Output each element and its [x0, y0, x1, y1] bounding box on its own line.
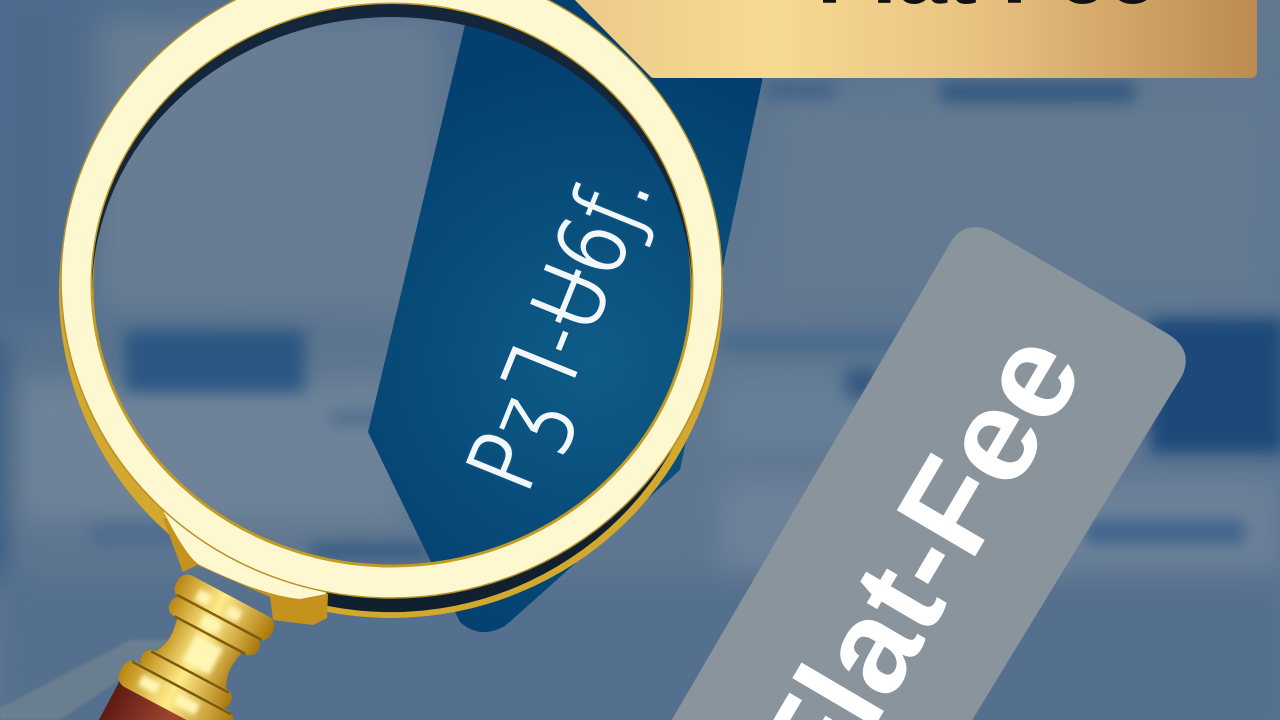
handle wood: [68, 680, 223, 720]
handle collar: [115, 567, 285, 720]
blue ribbon panel: [368, 0, 770, 632]
magnifying glass: [59, 0, 723, 720]
lens inner shadow crescent: [92, 4, 692, 292]
ring edge lines: [61, 0, 722, 598]
ring flange: [163, 510, 328, 625]
handle: [65, 567, 285, 720]
cream ring: [61, 0, 722, 598]
ring back rim: [59, 0, 723, 618]
grey rotated Flat-Fee card: [660, 227, 1186, 720]
lens text: Pʒᒣ-Ʉ6ƒ.: [445, 153, 676, 506]
gold title plate: [565, 0, 1257, 78]
